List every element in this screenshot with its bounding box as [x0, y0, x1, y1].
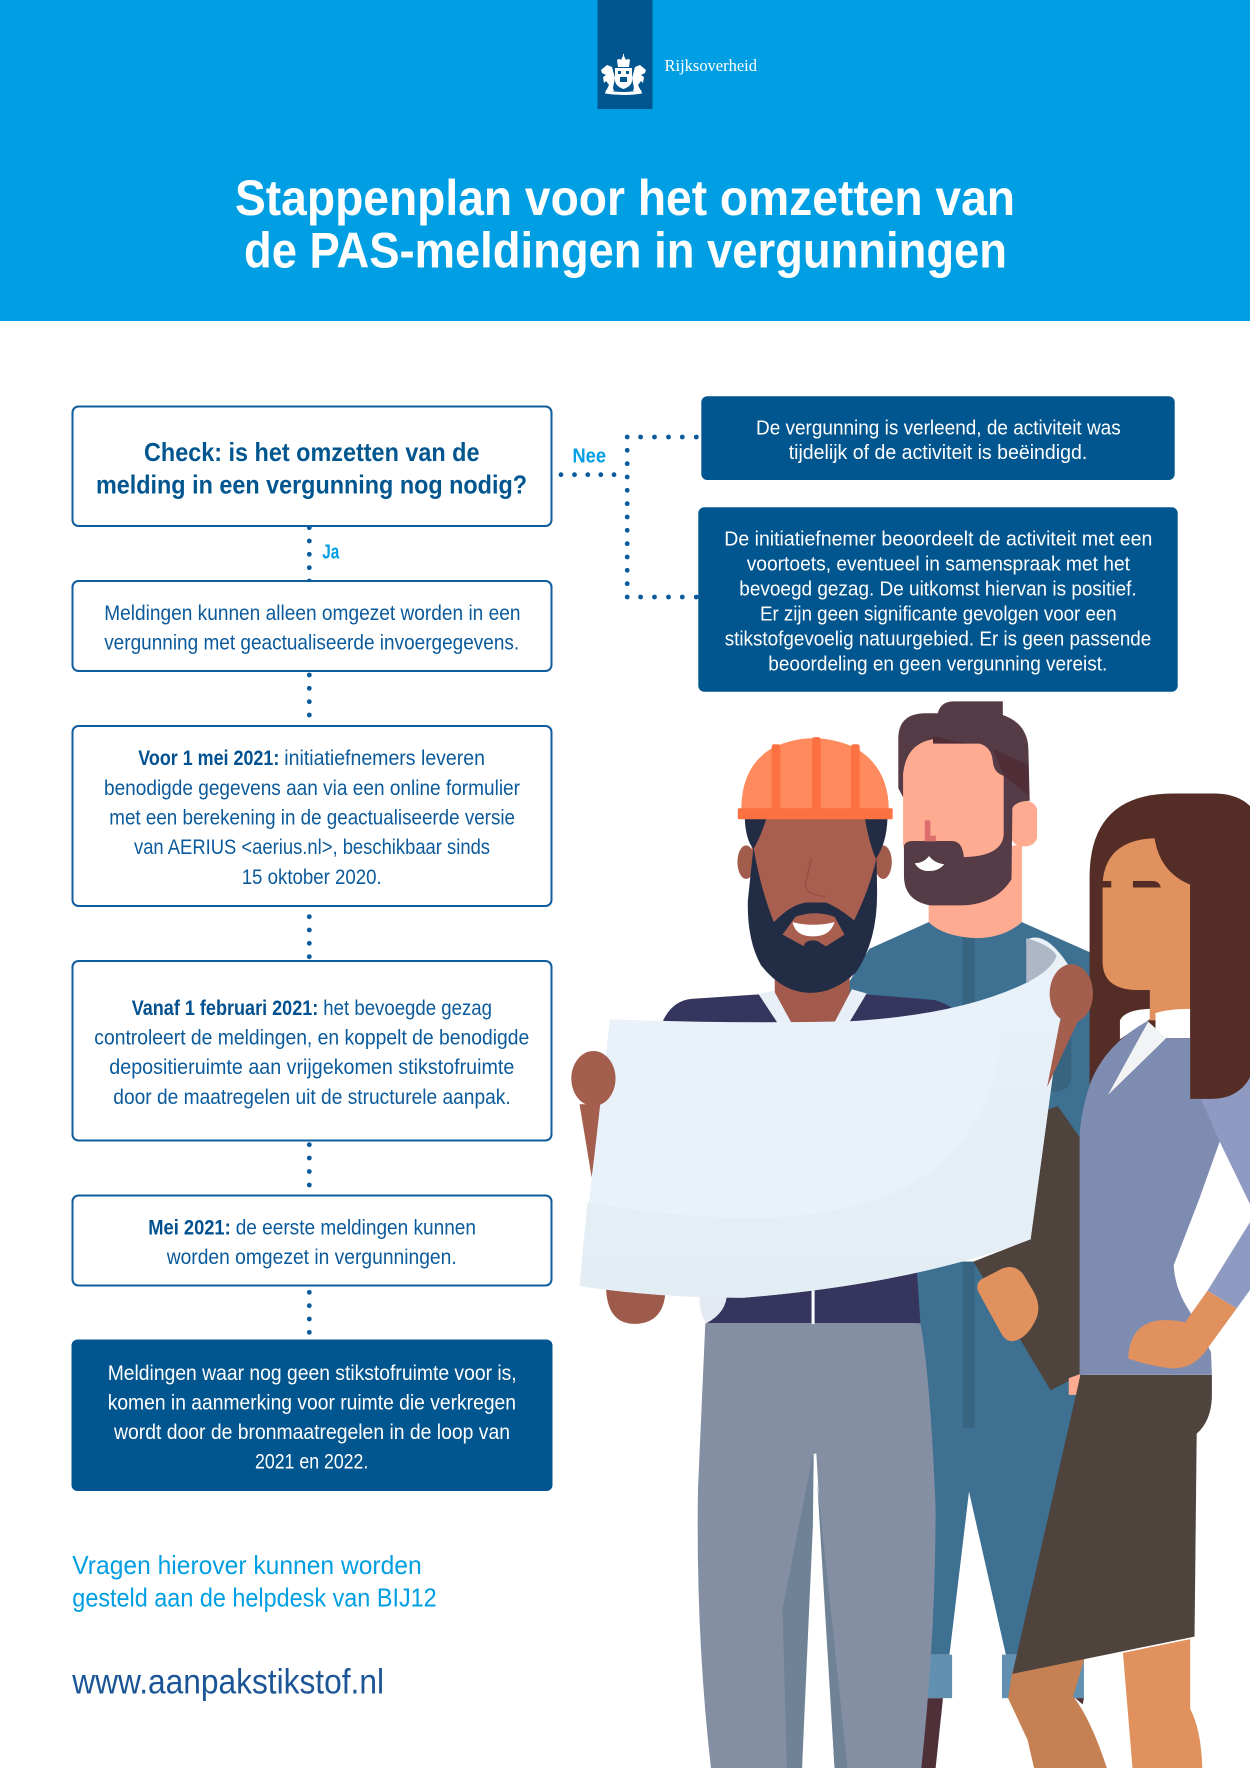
dotted connectors: Nee branch: [559, 435, 699, 599]
helpdesk text: Vragen hierover kunnen worden: [72, 1550, 422, 1580]
panel: bronmaatregelen (dark): 2021 en 2022.: [255, 1451, 368, 1474]
panel: vanaf 1 februari 2021: controleert de meldingen, en koppelt de benodigde: [94, 1026, 529, 1049]
title: [235, 170, 1015, 278]
figure: man with helmet: [580, 737, 958, 1768]
panel: vanaf 1 februari 2021: depositieruimte aan vrijgekomen stikstofruimte: [109, 1056, 514, 1079]
panel: vergunning verleend (dark): De vergunning is verleend, de activiteit was: [756, 417, 1121, 439]
icon: orange helmet: [738, 737, 893, 819]
panel: mei 2021: de eerste meldingen kunnen: [236, 1216, 476, 1239]
panel: voortoets (dark): De initiatiefnemer beoordeelt de activiteit met een: [724, 529, 1152, 551]
panel: voor 1 mei 2021: 15 oktober 2020.: [242, 866, 382, 889]
panel: voortoets (dark): voortoets, eventueel in samenspraak met het: [747, 554, 1130, 576]
illustration: three people with a plan: [571, 701, 1250, 1768]
panel: bronmaatregelen (dark): wordt door de bronmaatregelen in de loop van: [113, 1421, 510, 1444]
panel: voortoets (dark): Er zijn geen significante gevolgen voor een: [760, 604, 1117, 626]
panel: voor 1 mei 2021: met een berekening in de geactualiseerde versie: [109, 806, 515, 830]
panel: bronmaatregelen (dark): Meldingen waar nog geen stikstofruimte voor is,: [108, 1362, 517, 1385]
title: de PAS-meldingen in vergunningen: [244, 222, 1007, 278]
hands holding the sheet: [571, 964, 1093, 1106]
panel: geactualiseerde invoergegevens: Meldingen kunnen alleen omgezet worden in een: [104, 602, 520, 625]
figure: middle man: [848, 701, 1090, 1768]
panel: voor 1 mei 2021: benodigde gegevens aan via een online formulier: [104, 777, 520, 800]
panel: voor 1 mei 2021: van AERIUS <aerius.nl>, beschikbaar sinds: [134, 836, 490, 859]
label: Nee: Nee: [572, 445, 606, 467]
dotted connectors: main flow: [307, 525, 312, 1335]
panel: vanaf 1 februari 2021: [72, 961, 552, 1140]
panel: voortoets (dark): beoordeling en geen vergunning vereist.: [768, 654, 1107, 676]
panel: bronmaatregelen (dark): [72, 1340, 552, 1491]
panel: voortoets (dark): bevoegd gezag. De uitkomst hiervan is positief.: [739, 579, 1137, 601]
panel: vanaf 1 februari 2021: door de maatregelen uit de structurele aanpak.: [113, 1086, 511, 1109]
panel: voor 1 mei 2021: initiatiefnemers leveren: [284, 747, 485, 770]
panel: mei 2021: [72, 1196, 552, 1286]
logo: Rijksoverheid band with crest: [598, 0, 757, 109]
panel: voortoets (dark): [698, 507, 1178, 692]
panel: vergunning verleend (dark): tijdelijk of de activiteit is beëindigd.: [789, 442, 1087, 464]
panel: voor 1 mei 2021: Voor 1 mei 2021:: [138, 747, 279, 770]
folder held under the arm: [973, 1106, 1080, 1395]
title: Stappenplan voor het omzetten van: [235, 170, 1015, 226]
panel: vanaf 1 februari 2021: het bevoegde gezag: [323, 997, 492, 1020]
panel: vergunning verleend (dark): [701, 396, 1175, 480]
panel: voortoets (dark): stikstofgevoelig natuurgebied. Er is geen passende: [725, 629, 1151, 651]
panel: voor 1 mei 2021: [72, 726, 552, 906]
panel: bronmaatregelen (dark): komen in aanmerking voor ruimte die verkregen: [108, 1391, 516, 1414]
figure: woman: [1008, 794, 1250, 1768]
panel: check question: Check: is het omzetten van de: [144, 437, 480, 467]
panel: mei 2021: worden omgezet in vergunningen.: [166, 1246, 457, 1269]
website url: www.aanpakstikstof.nl: [71, 1662, 384, 1701]
panel: check question: melding in een vergunning nog nodig?: [96, 469, 527, 499]
label: Ja: Ja: [322, 541, 340, 563]
blueprint sheet: [580, 937, 1069, 1298]
panel: geactualiseerde invoergegevens: vergunning met geactualiseerde invoergegevens.: [104, 631, 519, 654]
logo wordmark: Rijksoverheid: [664, 56, 757, 75]
header banner: [0, 0, 1250, 321]
panel: mei 2021: Mei 2021:: [148, 1216, 231, 1239]
icon: coat of arms: [601, 54, 646, 95]
panel: vanaf 1 februari 2021: Vanaf 1 februari 2021:: [132, 997, 318, 1020]
panel: check question: [72, 406, 552, 526]
helpdesk text: [72, 1550, 437, 1613]
panel: geactualiseerde invoergegevens: [72, 581, 552, 671]
helpdesk text: gesteld aan de helpdesk van BIJ12: [72, 1583, 437, 1613]
